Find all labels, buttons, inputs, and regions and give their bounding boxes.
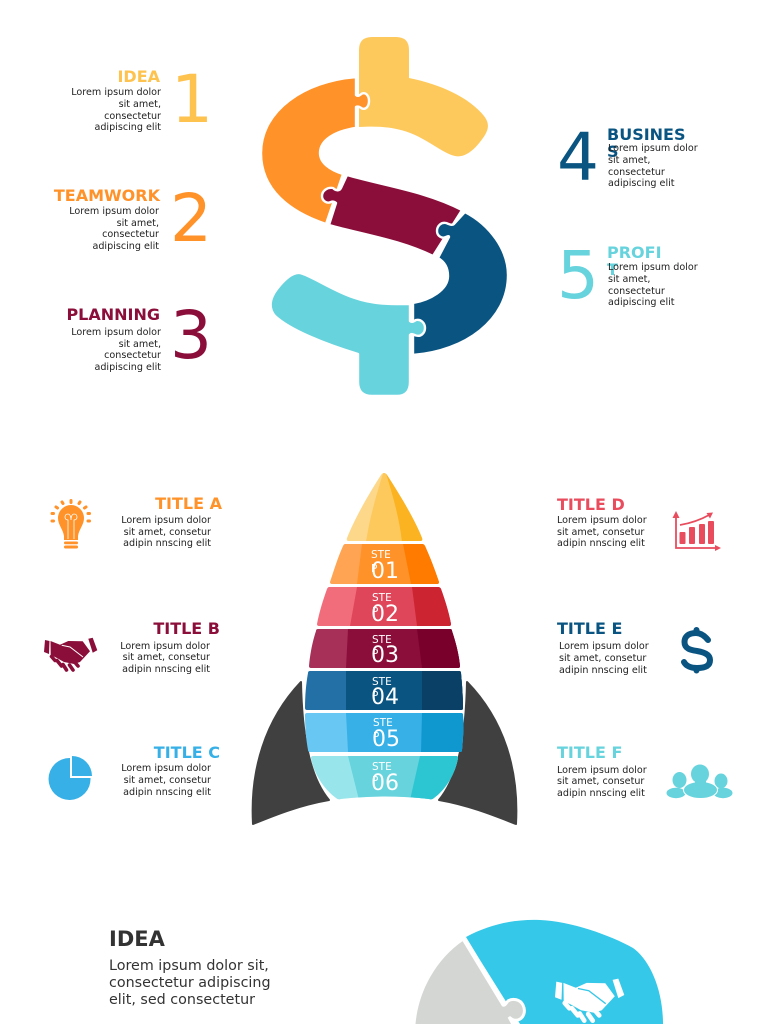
title D block: adipin nnscing elit [557, 538, 645, 549]
step 06 tier: 06 [371, 771, 399, 796]
step 5: profit [557, 237, 698, 314]
title F block: Lorem ipsum dolor [557, 765, 647, 776]
step 4: business: S [607, 142, 619, 161]
icon: growth chart [672, 511, 721, 551]
step 1: idea: IDEA [117, 67, 161, 86]
title C block: adipin nnscing elit [123, 787, 211, 798]
step 3: planning: consectetur [104, 350, 161, 361]
step 3: planning: adipiscing elit [94, 362, 161, 373]
step 5: profit: sit amet, [608, 274, 650, 285]
step 2: teamwork: Lorem ipsum dolor [69, 206, 159, 217]
title E block: sit amet, consetur [559, 653, 646, 664]
title F block: adipin nnscing elit [557, 788, 645, 799]
step 02 tier: 02 [371, 602, 399, 627]
puzzle circle [414, 920, 663, 1024]
idea text block: IDEA [109, 927, 166, 951]
step 05 tier [305, 713, 464, 752]
step 01 tier: 01 [371, 559, 399, 584]
step 4: business: consectetur [608, 167, 665, 178]
title E block: Lorem ipsum dolor [559, 641, 649, 652]
title C block: TITLE C [154, 743, 220, 762]
icon: people [666, 764, 732, 798]
step 5: profit: adipiscing elit [608, 297, 675, 308]
step 01 tier [330, 544, 439, 584]
step 3: planning: Lorem ipsum dolor [71, 327, 161, 338]
title F block: sit amet, consetur [557, 776, 644, 787]
title F block [557, 743, 647, 799]
step 4: business: sit amet, [608, 155, 650, 166]
title A block: adipin nnscing elit [123, 538, 211, 549]
step 5: profit: PROFI [607, 243, 662, 262]
title A block: TITLE A [155, 494, 223, 513]
step 4: business: BUSINES [607, 125, 686, 144]
step 02 tier: STE [372, 592, 392, 604]
step 3: planning: 3 [170, 297, 212, 374]
rocket nose [346, 473, 422, 541]
step 1: idea: 1 [171, 61, 213, 138]
title B block: sit amet, consetur [123, 652, 210, 663]
step 2: teamwork [54, 180, 212, 257]
puzzle piece: blue [466, 920, 663, 1024]
idea text block: Lorem ipsum dolor sit, [109, 958, 269, 974]
title D block: Lorem ipsum dolor [557, 515, 647, 526]
step 03 tier [309, 629, 460, 668]
title E block: adipin nnscing elit [559, 665, 647, 676]
dollar sign puzzle graphic [261, 37, 508, 396]
step 05 tier: STE [373, 717, 393, 729]
step 03 tier: P [372, 648, 378, 660]
idea text block: consectetur adipiscing [109, 975, 271, 991]
puzzle piece: yellow top [359, 37, 488, 156]
step 4: business [557, 119, 698, 196]
step 03 tier: 03 [371, 643, 399, 668]
idea text block [109, 927, 271, 1008]
step 4: business: 4 [557, 119, 599, 196]
step 2: teamwork: TEAMWORK [54, 186, 161, 205]
step 1: idea: sit amet, [119, 99, 161, 110]
step 04 tier [305, 671, 463, 710]
title C block: sit amet, consetur [124, 775, 211, 786]
puzzle piece: orange left [261, 77, 369, 224]
step 2: teamwork: sit amet, [117, 218, 159, 229]
right fin [439, 682, 516, 824]
step 01 tier: STE [371, 549, 391, 561]
step 04 tier: 04 [371, 685, 399, 710]
step 5: profit: consectetur [608, 286, 665, 297]
step 04 tier: STE [372, 676, 392, 688]
step 3: planning: PLANNING [66, 305, 160, 324]
step 06 tier: P [372, 775, 378, 787]
step 1: idea [71, 61, 213, 138]
step 5: profit: T [607, 260, 618, 279]
panel: dollar puzzle section [54, 37, 698, 396]
panel: rocket section [44, 465, 732, 824]
step 2: teamwork: 2 [170, 180, 212, 257]
title B block: TITLE B [153, 619, 220, 638]
puzzle piece: teal bottom [271, 273, 425, 396]
title A block [121, 494, 223, 549]
title D block: TITLE D [557, 495, 625, 514]
step 02 tier: P [372, 606, 378, 618]
title D block: sit amet, consetur [557, 527, 644, 538]
step 4: business: adipiscing elit [608, 178, 675, 189]
title A block: Lorem ipsum dolor [121, 515, 211, 526]
step 1: idea: consectetur [104, 111, 161, 122]
step 5: profit: Lorem ipsum dolor [608, 262, 698, 273]
title C block: Lorem ipsum dolor [121, 763, 211, 774]
puzzle piece: maroon middle [322, 175, 462, 256]
title D block [557, 495, 647, 549]
step 06 tier [311, 756, 458, 800]
left fin [253, 682, 329, 824]
puzzle piece: gray [414, 939, 524, 1024]
step 05 tier: P [373, 731, 379, 743]
step 06 tier: STE [372, 761, 392, 773]
step 05 tier: 05 [372, 727, 400, 752]
icon: pie chart [49, 756, 92, 800]
step 03 tier: STE [372, 634, 392, 646]
title E block [557, 619, 649, 676]
step 2: teamwork: consectetur [102, 229, 159, 240]
step 2: teamwork: adipiscing elit [92, 241, 159, 252]
step 3: planning: sit amet, [119, 339, 161, 350]
panel: bottom idea section [109, 920, 663, 1024]
step 3: planning [66, 297, 212, 374]
icon: light bulb [52, 500, 90, 548]
puzzle piece: navy right [413, 212, 508, 355]
idea text block: elit, sed consectetur [109, 992, 255, 1008]
rocket graphic [253, 465, 516, 824]
icon: handshake [44, 638, 97, 670]
title B block [120, 619, 220, 675]
title B block: adipin nnscing elit [122, 664, 210, 675]
title E block: TITLE E [557, 619, 622, 638]
title A block: sit amet, consetur [124, 527, 211, 538]
icon: dollar [684, 630, 710, 670]
step 01 tier: P [371, 563, 377, 575]
step 1: idea: adipiscing elit [94, 122, 161, 133]
step 02 tier [317, 587, 451, 626]
title C block [121, 743, 220, 798]
icon: handshake white [555, 979, 624, 1021]
title B block: Lorem ipsum dolor [120, 641, 210, 652]
title F block: TITLE F [557, 743, 622, 762]
step 5: profit: 5 [557, 237, 599, 314]
step 1: idea: Lorem ipsum dolor [71, 87, 161, 98]
step 4: business: Lorem ipsum dolor [608, 143, 698, 154]
step 04 tier: P [372, 690, 378, 702]
